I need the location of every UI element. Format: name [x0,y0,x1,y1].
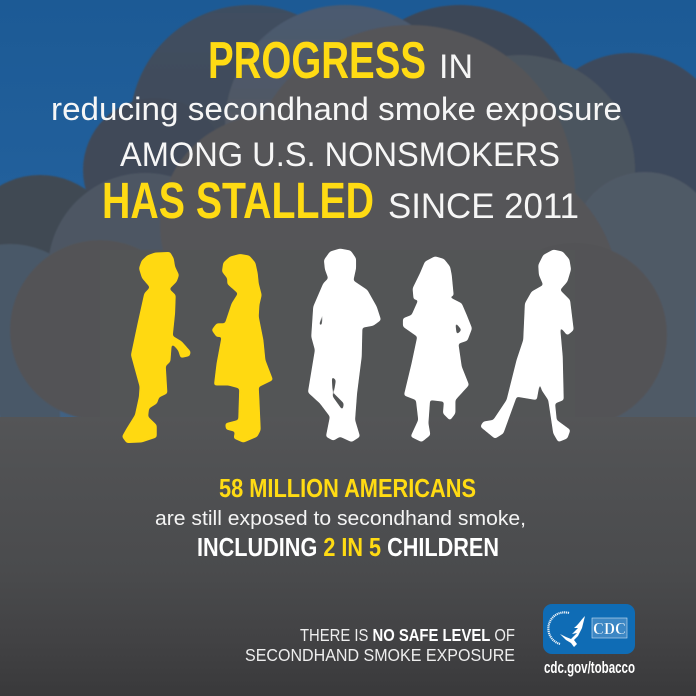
statistic text [155,475,526,562]
title line 4: HAS STALLED [102,172,374,229]
website address: cdc.gov/tobacco [544,658,635,677]
white boy silhouette [308,249,381,442]
title line 1: IN [439,48,473,86]
CDC logo [543,604,635,654]
title line 1: PROGRESS [208,32,426,90]
footer message: SECONDHAND SMOKE EXPOSURE [245,645,515,665]
white girl silhouette [403,256,472,442]
icon: HHS eagle seal [548,612,585,647]
yellow girl silhouette [212,254,273,443]
title line 4: SINCE 2011 [388,187,579,226]
title [51,32,622,229]
yellow boy silhouette [122,252,191,443]
CDC wordmark: CDC [593,619,626,638]
children silhouettes [122,249,574,443]
statistic description: are still exposed to secondhand smoke, [155,507,526,530]
white running boy silhouette [480,250,574,442]
statistic headline: 58 MILLION AMERICANS [219,475,476,503]
footer message [245,625,515,665]
footer message: THERE IS NO SAFE LEVEL OF [300,625,515,645]
title line 3: AMONG U.S. NONSMOKERS [120,136,560,174]
title line 2: reducing secondhand smoke exposure [51,91,622,127]
children statistic: INCLUDING 2 IN 5 CHILDREN [197,532,499,562]
